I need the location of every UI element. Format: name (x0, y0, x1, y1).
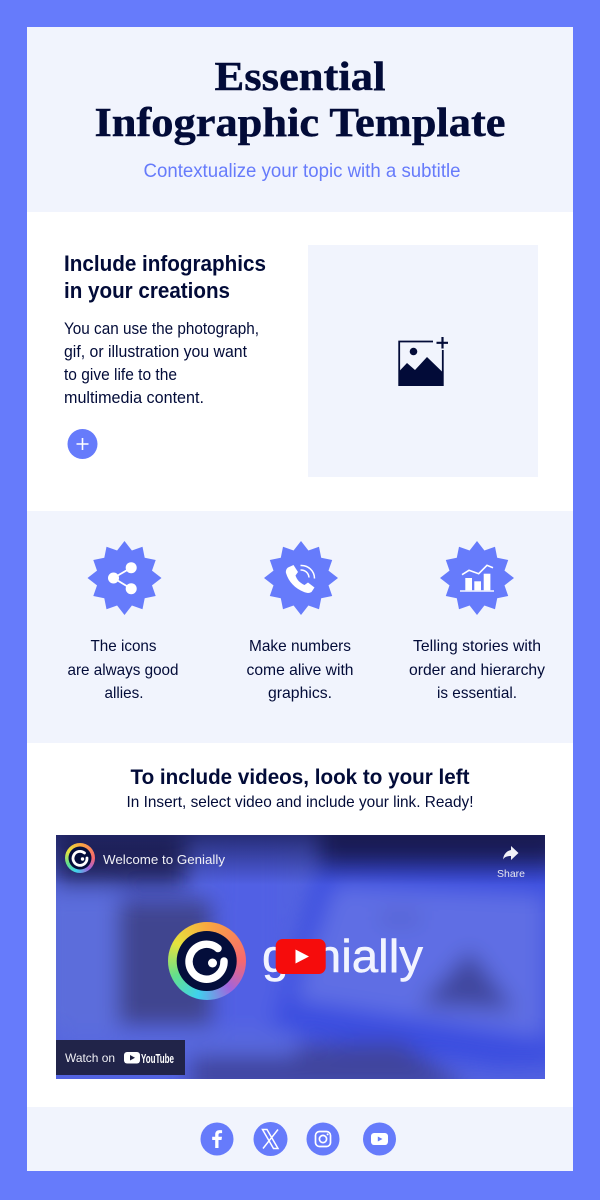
caption: stories: Telling stories with (413, 638, 541, 655)
play button (276, 939, 326, 974)
item: phone (246, 541, 354, 702)
caption: stories: is essential. (437, 685, 517, 702)
icon: youtube (363, 1122, 396, 1156)
caption: numbers: graphics. (268, 685, 332, 702)
title (94, 53, 506, 145)
item: chart (409, 541, 545, 702)
share button: Share (497, 868, 525, 880)
text block: intro body: to give life to the (64, 366, 177, 384)
watch on youtube: YouTube (141, 1051, 174, 1066)
panel: icons row (27, 511, 573, 743)
wordmark: genially: genially (262, 930, 423, 982)
panel: footer (27, 1107, 573, 1171)
watch on youtube (56, 1040, 185, 1075)
caption: numbers (246, 638, 354, 702)
title: Essential (214, 53, 386, 99)
icon: plus button (68, 429, 98, 459)
icon: chart badge (440, 541, 514, 615)
icon: share badge (88, 541, 162, 615)
caption: stories: order and hierarchy (409, 662, 545, 679)
heading: videos: To include videos, look to your left (130, 765, 470, 789)
logo: genially (168, 922, 246, 1000)
share button (498, 846, 524, 877)
text block: intro body: multimedia content. (64, 389, 204, 407)
caption: icons: The icons (90, 638, 156, 655)
subtitle: Contextualize your topic with a subtitle (144, 160, 460, 182)
heading: include infographics: Include infographics (64, 251, 266, 276)
text block: intro body: gif, or illustration you want (64, 343, 247, 361)
blurred background (56, 835, 545, 1079)
icon: instagram (306, 1122, 340, 1156)
caption: numbers: Make numbers (249, 638, 351, 655)
icon: phone badge (264, 541, 338, 615)
text block: intro body (64, 320, 259, 407)
icon: add image (398, 337, 448, 386)
heading: include infographics (64, 251, 266, 303)
panel: video section (27, 743, 573, 1107)
caption: icons: are always good (68, 662, 178, 679)
caption: icons (68, 638, 178, 702)
caption: icons: allies. (104, 685, 144, 702)
video title bar (65, 843, 226, 873)
item: share (68, 541, 178, 702)
watch on youtube: Watch on (65, 1051, 115, 1065)
panel: intro (27, 212, 573, 511)
video thumbnail (56, 835, 545, 1079)
image placeholder (308, 245, 538, 477)
title: Infographic Template (94, 99, 506, 145)
panel: header (27, 27, 573, 212)
icon: facebook (200, 1122, 234, 1156)
text block: video instructions: In Insert, select video and include your link. Ready! (126, 794, 474, 811)
icon: x (254, 1122, 288, 1156)
caption: stories (409, 638, 545, 702)
heading: include infographics: in your creations (64, 278, 230, 303)
video title bar: Welcome to Genially (103, 852, 226, 867)
caption: numbers: come alive with (246, 662, 354, 679)
text block: intro body: You can use the photograph, (64, 320, 259, 338)
